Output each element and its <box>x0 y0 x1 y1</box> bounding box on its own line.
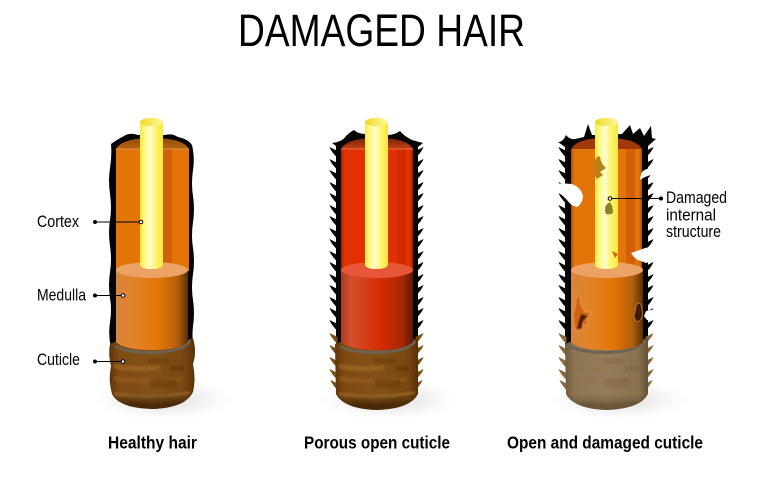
caption: Open and damaged cuticle: Open and damaged cuticle <box>507 432 703 452</box>
leader: Damaged internal structure <box>608 196 663 200</box>
panel: porous open cuticle <box>314 118 466 422</box>
medulla damage left <box>573 296 592 331</box>
cuticle tear damage: white gaps <box>552 166 660 320</box>
label: Medulla: Medulla <box>37 286 87 304</box>
shadow: damaged hair <box>544 378 696 422</box>
damage spot: rod middle <box>605 202 613 214</box>
pale cuticle spikes <box>558 333 654 391</box>
label: Damaged internal structure: Damaged <box>666 189 727 207</box>
leader: Medulla <box>93 294 125 298</box>
cuticle <box>335 338 418 410</box>
leader: Cortex <box>93 220 143 224</box>
title: DAMAGED HAIR <box>238 5 525 56</box>
yellow core rod <box>140 118 163 269</box>
label: Damaged internal structure <box>666 189 727 241</box>
medulla damage right <box>634 303 642 322</box>
cortex <box>116 138 189 271</box>
cortex <box>336 138 418 271</box>
yellow core rod <box>365 118 388 269</box>
label: Cuticle: Cuticle <box>37 351 80 369</box>
brown cuticle spikes <box>330 333 424 391</box>
shadow: healthy hair <box>89 378 241 422</box>
label: Damaged internal structure: internal <box>666 206 716 224</box>
label: Damaged internal structure: structure <box>666 223 721 241</box>
cuticle <box>109 338 195 409</box>
caption: Porous open cuticle: Porous open cuticle <box>304 432 450 452</box>
cuticle <box>565 338 648 410</box>
panel: open and damaged cuticle <box>544 118 696 422</box>
medulla <box>116 262 188 350</box>
damage spot: rod lower <box>612 251 618 258</box>
shadow: porous hair <box>314 378 466 422</box>
medulla <box>571 262 643 350</box>
damage spot: rod upper <box>595 156 606 179</box>
outer black cuticle layer <box>109 134 194 348</box>
label: Cortex: Cortex <box>37 213 80 231</box>
yellow core rod with damage <box>595 118 618 269</box>
caption: Healthy hair: Healthy hair <box>108 432 197 452</box>
medulla <box>341 262 413 350</box>
outer black spiked cuticle layer <box>558 124 656 345</box>
cortex <box>566 138 647 271</box>
outer black spiked cuticle layer <box>330 130 424 345</box>
panel: healthy hair <box>89 118 241 422</box>
leader: Cuticle <box>93 360 125 364</box>
